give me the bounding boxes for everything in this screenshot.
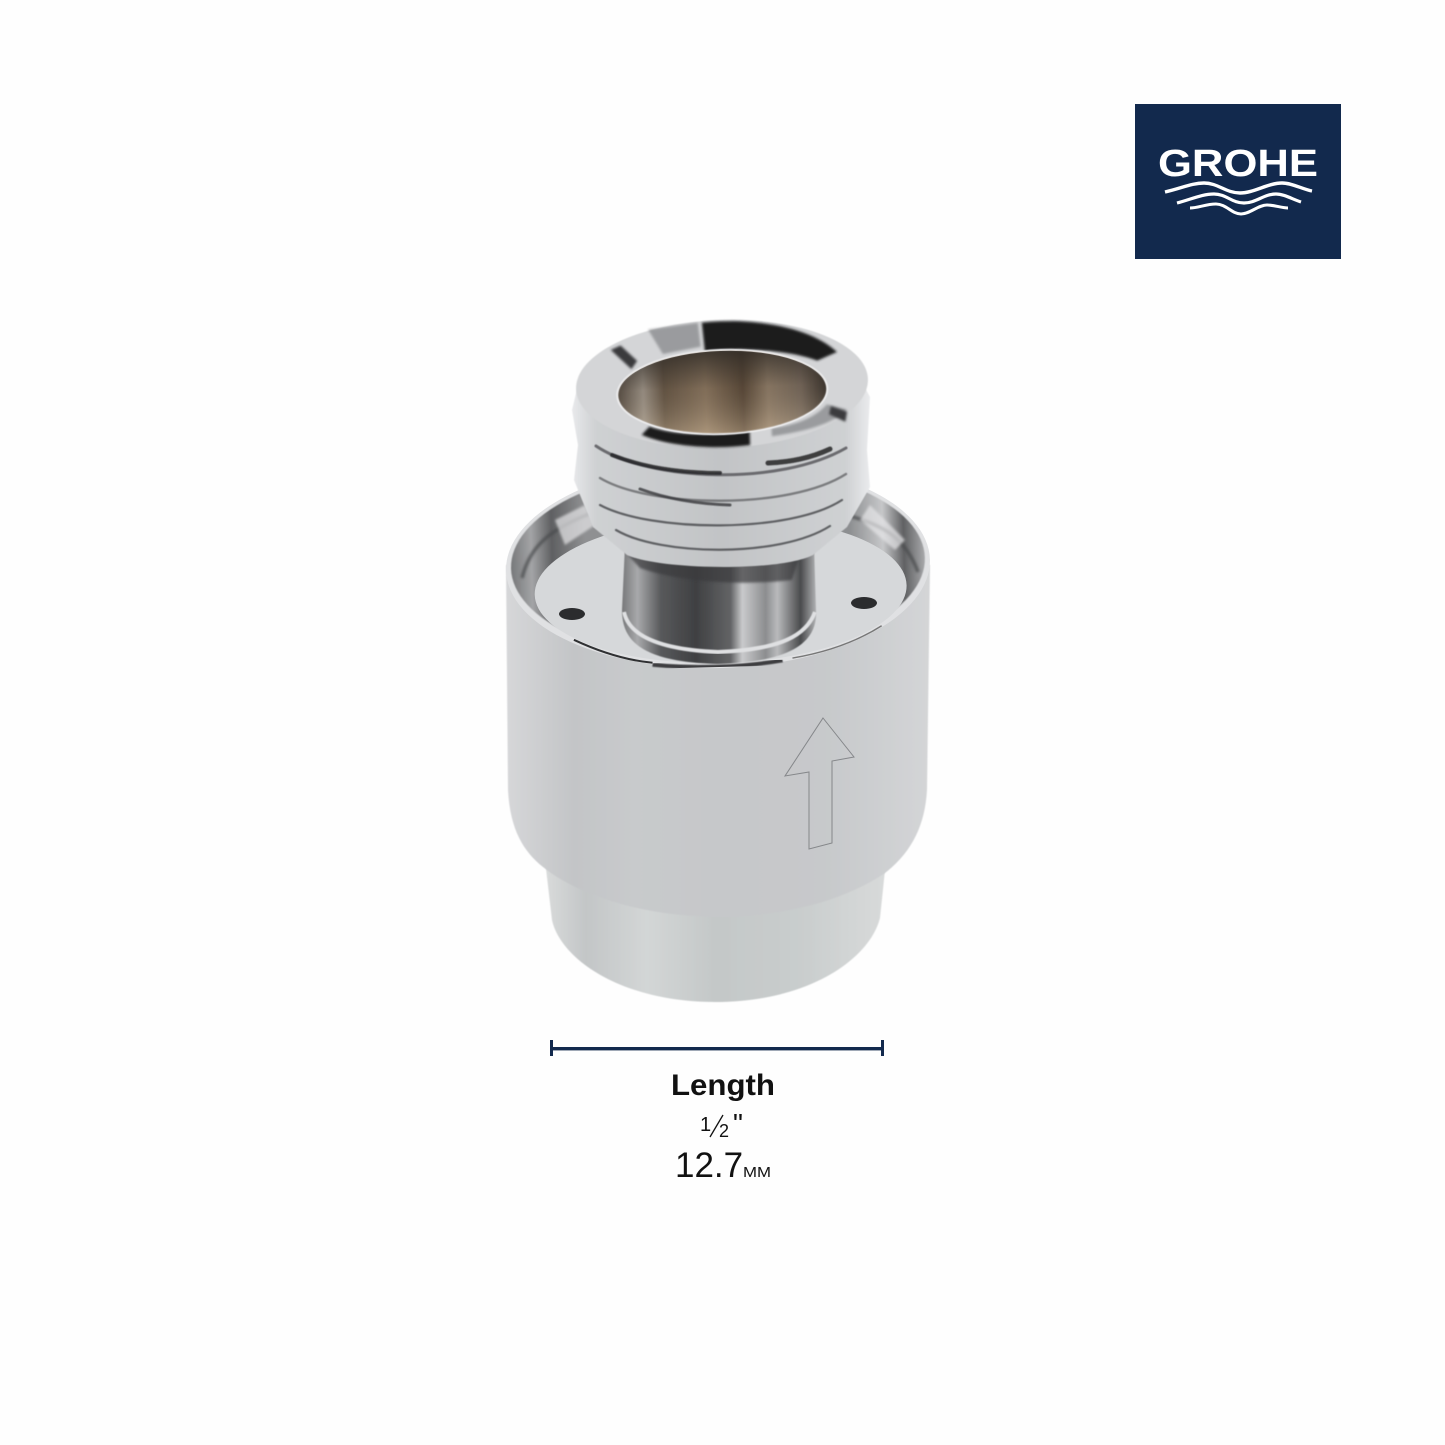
interior wall — [508, 461, 927, 665]
thread grooves — [596, 446, 846, 550]
dimension value: millimetres: MM — [743, 1164, 771, 1181]
upper rim and interior — [503, 456, 933, 674]
neck shoulder shadow — [628, 555, 800, 583]
dimension label: Length: Length — [671, 1069, 775, 1102]
interior floor — [533, 512, 909, 668]
logo: GROHE — [1135, 104, 1341, 259]
interior speckle — [555, 505, 905, 550]
product photo: chrome flow fitting — [503, 315, 933, 1002]
mouth chamfer ring — [574, 315, 870, 453]
neck base shine — [624, 612, 815, 652]
dimension value: inches: " — [733, 1108, 743, 1139]
front lip dark edge — [574, 638, 653, 665]
interior groove marks — [522, 512, 918, 578]
logo: GROHE: GROHE — [1158, 143, 1318, 185]
dimension value: millimetres: 12.7 — [675, 1146, 743, 1185]
dimension value: inches: 1 — [700, 1114, 711, 1136]
neck — [622, 545, 816, 664]
dimension bar — [550, 1040, 884, 1056]
bore opening — [615, 345, 830, 439]
ring reflections — [702, 317, 837, 365]
threaded section — [572, 340, 870, 567]
mounting holes — [559, 597, 877, 620]
rim edge — [503, 456, 933, 674]
engraved flow arrow — [785, 718, 854, 849]
main cylinder body — [506, 565, 930, 917]
dimension value: inches — [700, 1108, 743, 1141]
dimension value: inches: 2 — [719, 1121, 729, 1141]
lower base section — [545, 860, 885, 1002]
